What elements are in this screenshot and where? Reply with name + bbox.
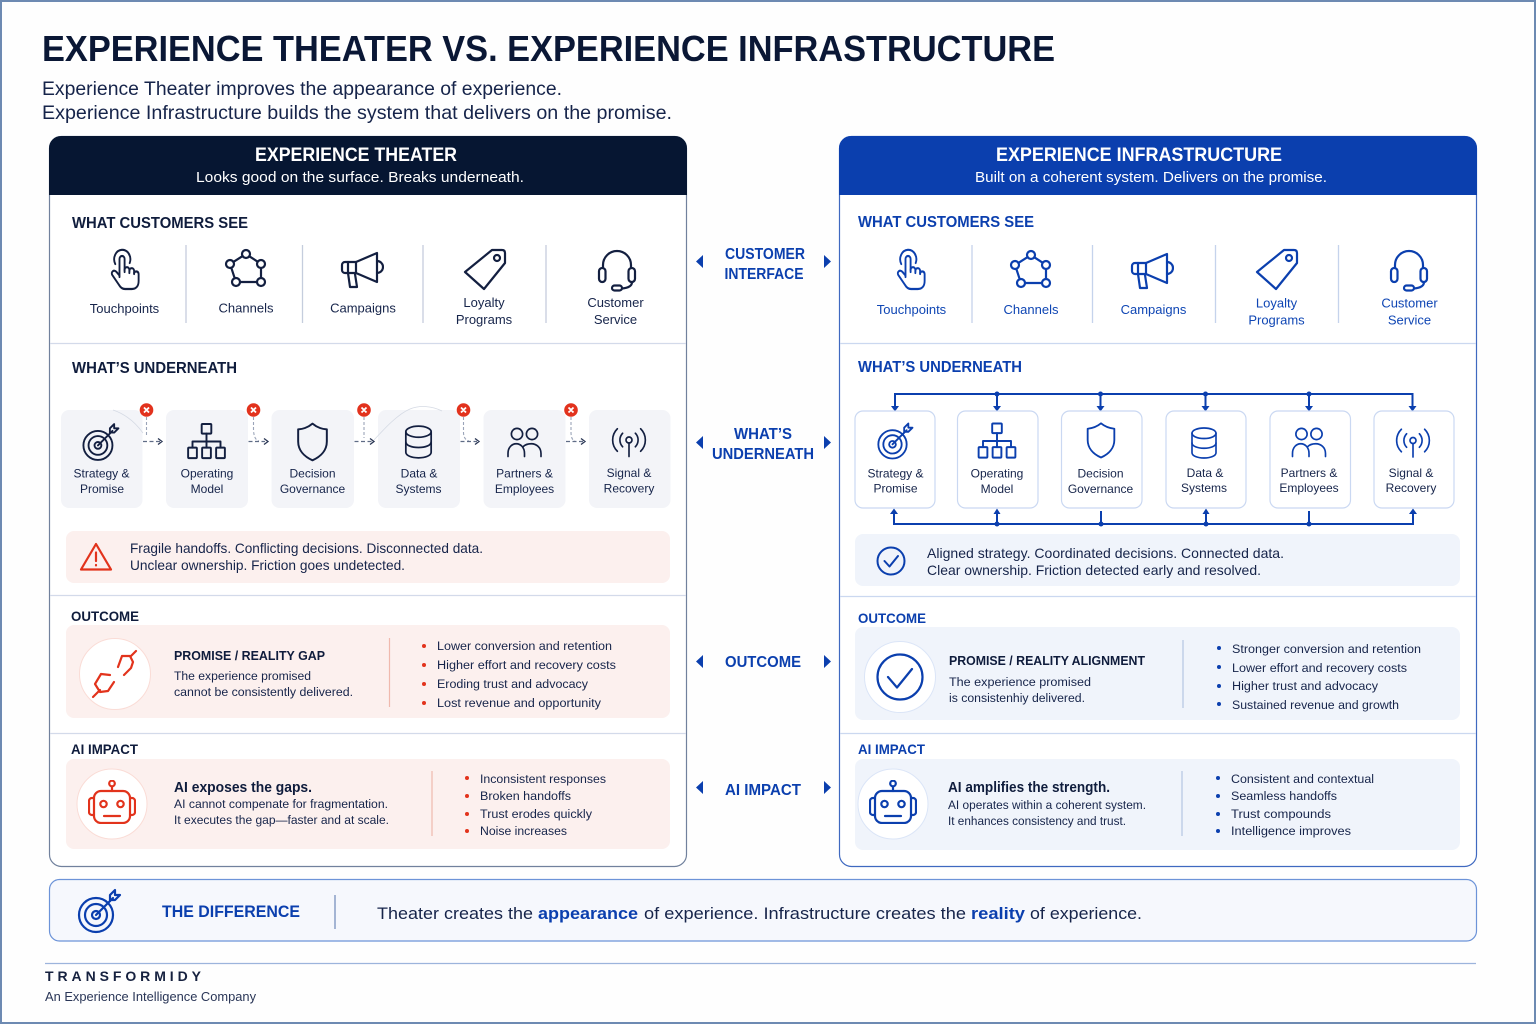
what's underneath: infrastructure: Partners & [1281, 466, 1337, 480]
panel: experience infrastructure [839, 136, 1477, 866]
footer [45, 964, 1476, 1004]
fragile handoffs alert [66, 531, 670, 583]
outcome: theater: PROMISE / REALITY GAP [174, 648, 325, 663]
icon: touchpoints [898, 250, 925, 289]
outcome: infrastructure [855, 610, 1460, 720]
outcome: infrastructure: is consistenhiy delivered. [949, 691, 1085, 705]
icon: operating model [979, 424, 1015, 458]
what's underneath: theater [61, 360, 670, 508]
footer: An Experience Intelligence Company [45, 990, 257, 1004]
ai impact: infrastructure: Consistent and contextual [1231, 772, 1374, 786]
icon: loyalty [465, 250, 505, 289]
icon: check circle [878, 548, 904, 574]
what customers see: infrastructure: Service [1388, 312, 1431, 328]
what's underneath: theater: Signal & [607, 466, 651, 480]
what's underneath: theater: WHAT’S UNDERNEATH [72, 360, 237, 377]
icon: customer service [599, 251, 635, 290]
icon: customer service [1391, 251, 1427, 290]
icon: strategy [878, 424, 912, 458]
ai impact: infrastructure: Seamless handoffs [1231, 789, 1337, 803]
what customers see: infrastructure: Touchpoints [877, 302, 947, 317]
what customers see: theater: Programs [456, 312, 513, 327]
what's underneath: infrastructure: Strategy & [867, 466, 924, 480]
icon: touchpoints [112, 250, 139, 289]
label: what's underneath: UNDERNEATH [712, 446, 814, 463]
what's underneath: infrastructure: Systems [1181, 481, 1227, 495]
aligned strategy callout: Aligned strategy. Coordinated decisions. Connected data. [927, 545, 1284, 561]
what's underneath: theater: Employees [495, 482, 554, 496]
ai impact: theater: Broken handoffs [480, 789, 571, 803]
ai impact: theater: It executes the gap—faster and at scale. [174, 813, 389, 827]
what customers see: theater: WHAT CUSTOMERS SEE [72, 215, 248, 232]
aligned strategy callout [855, 534, 1460, 586]
label: ai impact: AI IMPACT [725, 782, 802, 799]
outcome: infrastructure: Sustained revenue and growth [1232, 698, 1399, 712]
outcome: theater: Higher effort and recovery costs [437, 658, 616, 672]
subtitle: Experience Infrastructure builds the system that delivers on the promise. [42, 102, 672, 124]
icon: campaigns [342, 253, 383, 287]
icon: governance [1088, 423, 1114, 458]
what's underneath: infrastructure: Model [981, 482, 1013, 496]
subtitle: Experience Theater improves the appearance of experience. [42, 78, 562, 100]
label: what's underneath [696, 426, 831, 463]
outcome: infrastructure: The experience promised [949, 675, 1091, 689]
outcome: theater: cannot be consistently delivered. [174, 685, 353, 699]
what customers see: theater: Service [594, 312, 637, 327]
what's underneath: infrastructure: Signal & [1389, 466, 1433, 480]
ai impact: infrastructure: Trust compounds [1231, 807, 1331, 821]
ai impact: theater: Trust erodes quickly [480, 807, 593, 821]
icon: robot [870, 781, 916, 823]
ai impact: infrastructure: AI operates within a coherent system. [948, 798, 1146, 812]
middle labels with arrows [696, 246, 831, 799]
title: EXPERIENCE THEATER VS. EXPERIENCE INFRASTRUCTURE [42, 28, 1055, 69]
what's underneath: theater: Strategy & [73, 466, 130, 480]
theater header: EXPERIENCE THEATER [255, 144, 457, 166]
outcome: infrastructure: Lower effort and recovery costs [1232, 661, 1407, 675]
label: what's underneath: WHAT’S [734, 426, 792, 443]
what customers see: infrastructure: Loyalty [1256, 296, 1298, 310]
the difference bar: appearance [538, 904, 638, 923]
the difference bar: Theater creates the [377, 904, 533, 923]
outcome: theater: OUTCOME [71, 608, 139, 624]
ai impact: theater: AI exposes the gaps. [174, 780, 312, 796]
what's underneath: infrastructure: Recovery [1386, 481, 1436, 495]
the difference bar: THE DIFFERENCE [162, 902, 300, 921]
what customers see: theater: Campaigns [330, 300, 396, 316]
label: customer interface: CUSTOMER [725, 246, 805, 263]
outcome: theater: The experience promised [174, 669, 311, 683]
icon: signal [613, 429, 645, 456]
icon: data [406, 426, 431, 458]
outcome: infrastructure: Higher trust and advocacy [1232, 679, 1379, 693]
icon: signal [1397, 429, 1429, 457]
infrastructure header [839, 136, 1477, 195]
ai impact: infrastructure: Intelligence improves [1231, 824, 1351, 838]
ai impact: infrastructure [855, 741, 1460, 850]
what customers see: infrastructure: Channels [1004, 302, 1059, 317]
label: customer interface [696, 246, 831, 283]
theater header: Looks good on the surface. Breaks underneath. [196, 169, 524, 186]
theater header [49, 136, 687, 195]
what customers see: infrastructure: WHAT CUSTOMERS SEE [858, 214, 1034, 231]
icon: loyalty [1257, 250, 1297, 289]
subtitle [42, 78, 672, 124]
the difference bar: reality [971, 904, 1026, 923]
infrastructure header: Built on a coherent system. Delivers on the promise. [975, 169, 1327, 186]
icon: strategy [83, 424, 118, 460]
what's underneath: theater: Partners & [496, 466, 553, 480]
icon: check ring [878, 654, 922, 700]
what's underneath: theater: Model [191, 482, 223, 496]
icon: data [1192, 428, 1216, 458]
icon: partners [508, 428, 541, 456]
panel: experience theater [49, 136, 687, 866]
what customers see: theater: Touchpoints [90, 301, 160, 316]
what customers see: theater: Customer [587, 295, 644, 310]
broken handoff markers [140, 403, 585, 444]
label: outcome: OUTCOME [725, 654, 801, 671]
what customers see: infrastructure: Programs [1248, 312, 1305, 328]
fragile handoffs alert: Fragile handoffs. Conflicting decisions. Disconnected data. [130, 540, 483, 556]
icon: channels [226, 250, 265, 286]
ai impact: infrastructure: AI amplifies the strength. [948, 780, 1110, 796]
outcome: infrastructure: OUTCOME [858, 610, 926, 626]
what customers see: theater [72, 215, 644, 327]
what customers see: infrastructure: Campaigns [1121, 302, 1187, 317]
what's underneath: theater: Decision [289, 466, 336, 480]
what's underneath: theater: Systems [395, 482, 442, 496]
what's underneath: infrastructure: Governance [1068, 482, 1134, 496]
outcome: theater: Lower conversion and retention [437, 639, 612, 653]
what's underneath: theater: Promise [80, 482, 124, 496]
aligned strategy callout: Clear ownership. Friction detected early and resolved. [927, 562, 1261, 578]
icon: target [79, 890, 120, 932]
label: customer interface: INTERFACE [724, 266, 804, 283]
ai impact: infrastructure: It enhances consistency and trust. [948, 814, 1126, 828]
label: ai impact [696, 781, 831, 799]
outcome: infrastructure: Stronger conversion and retention [1232, 642, 1421, 656]
icon: partners [1292, 428, 1326, 456]
icon: governance [298, 424, 327, 460]
what's underneath: infrastructure: Operating [971, 466, 1023, 480]
what's underneath: infrastructure: WHAT’S UNDERNEATH [858, 359, 1022, 376]
ai impact: theater: AI IMPACT [71, 741, 138, 757]
what's underneath: theater: Recovery [604, 482, 654, 496]
label: outcome [696, 654, 831, 671]
icon: broken chain [93, 651, 136, 697]
ai impact: theater: Inconsistent responses [480, 772, 606, 786]
the difference bar: of experience. [1030, 904, 1142, 923]
what's underneath: infrastructure: Decision [1077, 466, 1124, 480]
outcome: theater [66, 608, 670, 718]
icon: campaigns [1132, 254, 1173, 288]
outcome: theater: Lost revenue and opportunity [437, 696, 602, 710]
the difference bar: of experience. Infrastructure creates the [644, 904, 966, 923]
fragile handoffs alert: Unclear ownership. Friction goes undetected. [130, 557, 405, 573]
ai impact: theater: Noise increases [480, 824, 567, 838]
what customers see: theater: Loyalty [463, 295, 505, 310]
what's underneath: theater: Data & [401, 466, 437, 480]
the difference bar [50, 880, 1476, 941]
what's underneath: theater: Operating [181, 466, 233, 480]
what's underneath: infrastructure [855, 359, 1454, 526]
ai impact: theater [66, 741, 670, 849]
what customers see: infrastructure: Customer [1381, 296, 1438, 310]
icon: channels [1011, 251, 1050, 287]
what's underneath: theater: Governance [280, 482, 346, 496]
connector buses [890, 392, 1417, 526]
what's underneath: infrastructure: Data & [1187, 466, 1223, 480]
what customers see: theater: Channels [219, 300, 274, 316]
icon: robot [89, 781, 135, 823]
icon: warning triangle [81, 544, 111, 570]
outcome: theater: Eroding trust and advocacy [437, 677, 589, 691]
what's underneath: infrastructure: Promise [873, 482, 918, 496]
ai impact: infrastructure: AI IMPACT [858, 741, 925, 757]
infrastructure header: EXPERIENCE INFRASTRUCTURE [996, 144, 1282, 166]
what customers see: infrastructure [858, 214, 1438, 328]
outcome: infrastructure: PROMISE / REALITY ALIGNMENT [949, 653, 1145, 668]
what's underneath: infrastructure: Employees [1279, 481, 1339, 495]
ai impact: theater: AI cannot compenate for fragmentation. [174, 797, 388, 811]
icon: operating model [188, 424, 225, 458]
footer: TRANSFORMIDY [45, 968, 202, 984]
